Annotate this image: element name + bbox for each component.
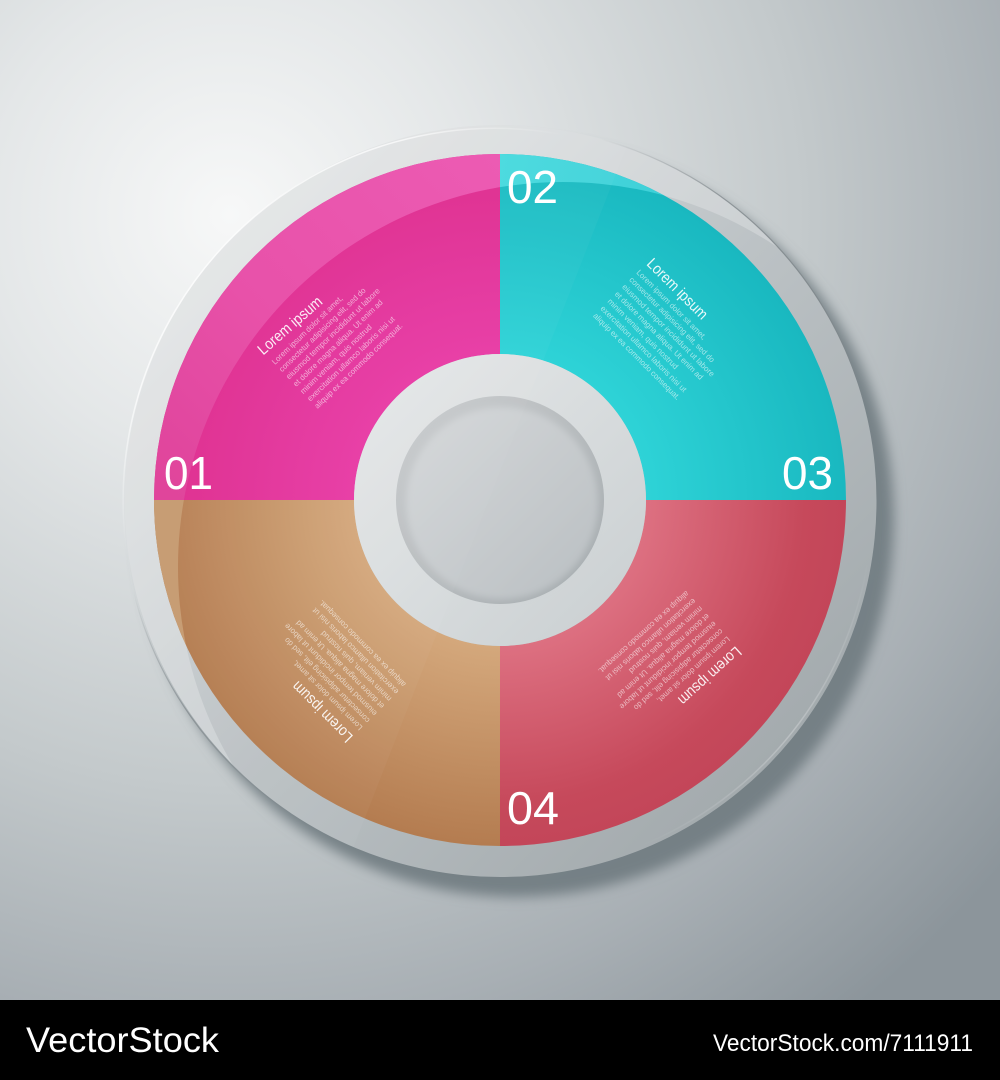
body copy: cyan: aliquip ex ea commodo consequat.	[591, 311, 682, 402]
body copy: cyan: minim veniam, quis nostrud	[606, 297, 680, 371]
panel: circle segments	[154, 154, 846, 846]
number 01: 01	[164, 447, 213, 499]
footer logo: VectorStock	[26, 1021, 220, 1060]
rim dark arc upper right	[600, 139, 866, 410]
body copy: cyan: eiusmod tempor incididunt ut labore	[620, 282, 717, 379]
number 03: 03	[782, 447, 833, 499]
body copy: red: et dolore magna aliqua. Ut enim ad	[615, 612, 711, 699]
rim light arc lower right	[640, 560, 868, 846]
hub ring	[354, 354, 646, 646]
body copy: brown: et dolore magna aliqua. Ut enim ad	[294, 618, 386, 710]
hub well	[396, 396, 604, 604]
footer url: VectorStock.com/7111911	[713, 1030, 973, 1057]
crescent pink part	[154, 154, 500, 500]
glass ring	[124, 125, 876, 877]
crescent brown part	[154, 500, 186, 645]
disc drop shadow	[138, 141, 894, 897]
body copy: brown	[268, 592, 408, 732]
body copy: red: minim veniam, quis nostrud	[627, 604, 704, 675]
heading: brown: Lorem ipsum	[289, 678, 357, 745]
glass crescent highlight on ring	[124, 125, 776, 764]
crescent on segments	[154, 154, 665, 645]
body copy: cyan: exercitation ullamco laboris nisi ut	[599, 304, 689, 394]
body copy: cyan	[591, 268, 731, 408]
body copy: red: exercitation ullamco laboris nisi ut	[603, 597, 698, 683]
text block: brown segment	[254, 592, 408, 745]
heading: red: Lorem ipsum	[674, 643, 744, 708]
rim light arc	[123, 128, 560, 560]
body copy: pink	[270, 271, 411, 410]
segment: brown	[154, 500, 500, 846]
body copy: pink: minim veniam, quis nostrud	[298, 323, 374, 396]
body copy: pink: eiusmod tempor incididunt ut labore	[284, 286, 382, 381]
number 04: 04	[507, 782, 559, 834]
body copy: brown: consectetur adipisicing elit, sed do	[282, 635, 372, 725]
body copy: red: consectetur adipisicing elit, sed do	[632, 627, 725, 712]
crescent cyan part	[500, 154, 665, 196]
footer bar	[0, 1000, 1000, 1080]
heading: cyan: Lorem ipsum	[643, 255, 711, 323]
number 02: 02	[507, 161, 558, 213]
body copy: brown: Lorem ipsum dolor sit amet,	[291, 658, 364, 732]
body copy: red	[590, 589, 732, 727]
rim dark arc lower left	[133, 590, 290, 813]
body copy: brown: minim veniam, quis nostrud	[319, 629, 393, 703]
center hub	[354, 354, 646, 646]
body copy: pink: et dolore magna aliqua. Ut enim ad	[291, 298, 385, 388]
text block: red segment	[590, 589, 744, 741]
body copy: red: Lorem ipsum dolor sit amet,	[655, 635, 732, 705]
text block: pink segment	[254, 256, 411, 412]
body copy: brown: exercitation ullamco laboris nisi ut	[310, 606, 400, 696]
segment 01: pink	[154, 154, 500, 500]
body copy: pink: Lorem ipsum dolor sit amet,	[270, 294, 345, 366]
body copy: cyan: consectetur adipisicing elit, sed do	[627, 275, 717, 365]
body copy: brown: eiusmod tempor incididunt ut labore	[282, 621, 379, 718]
body copy: pink: consectetur adipisicing elit, sed do	[277, 286, 368, 374]
body copy: cyan: Lorem ipsum dolor sit amet,	[635, 268, 708, 342]
hub well highlight	[406, 407, 598, 599]
text block: cyan segment	[591, 255, 745, 408]
body copy: brown: aliquip ex ea commodo consequat.	[317, 598, 408, 689]
body copy: red: eiusmod tempor incididunt ut labore	[617, 619, 718, 711]
glass shine band	[0, 120, 637, 1000]
body copy: pink: exercitation ullamco laboris nisi ut	[306, 314, 397, 403]
body copy: pink: aliquip ex ea commodo consequat.	[313, 321, 405, 410]
segment 04: red	[500, 500, 846, 846]
body copy: red: aliquip ex ea commodo consequat.	[596, 589, 691, 675]
segment 02-03: cyan	[500, 154, 846, 500]
heading: pink: Lorem ipsum	[255, 293, 326, 359]
body copy: cyan: et dolore magna aliqua. Ut enim ad	[613, 290, 705, 382]
